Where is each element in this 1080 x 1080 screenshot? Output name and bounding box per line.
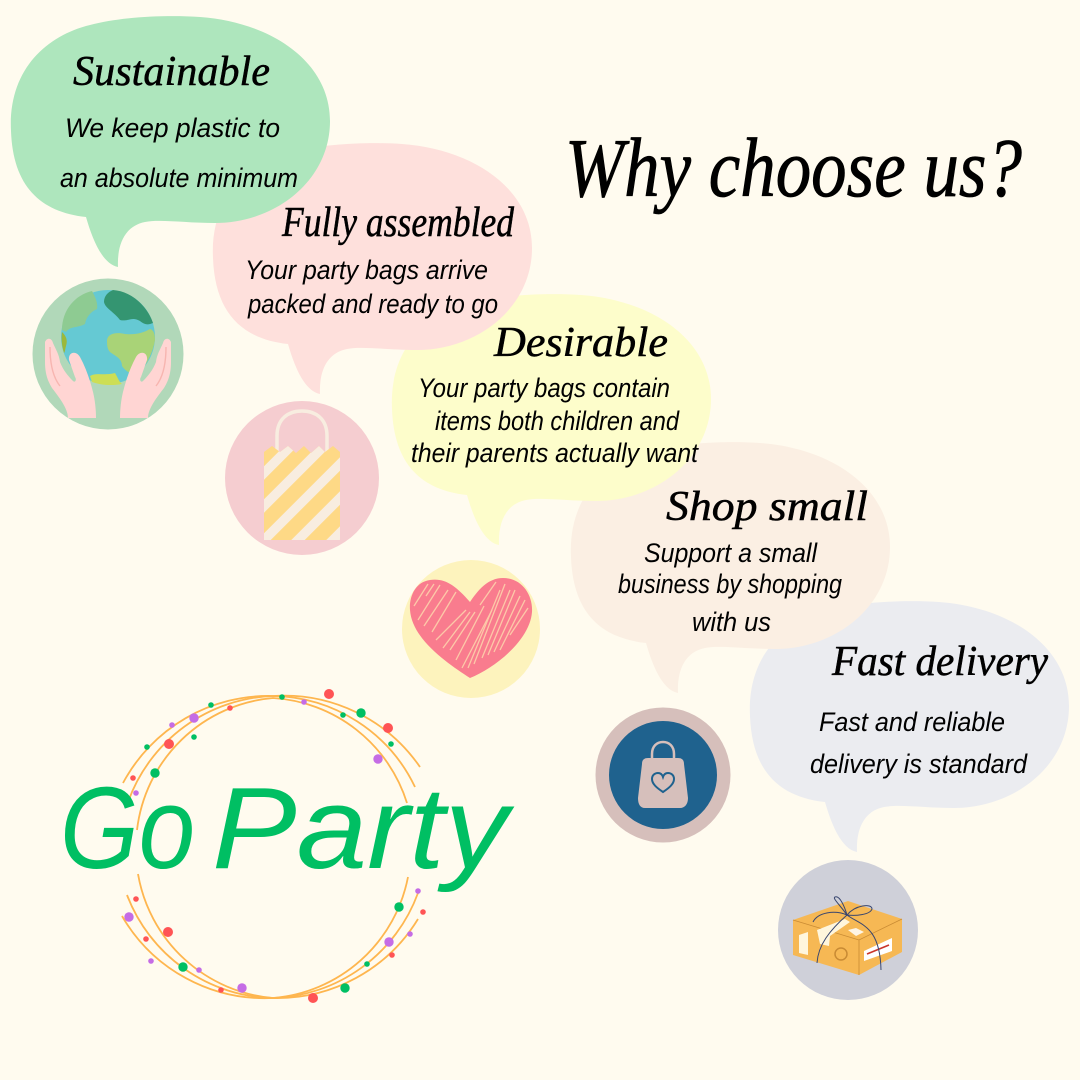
text: sustainable description — [60, 113, 298, 193]
panel: fully assembled — [213, 143, 532, 394]
heading: fully assembled: Fully assembled — [281, 200, 515, 246]
text: shop small description: business by shopping — [618, 569, 842, 599]
right hand — [120, 339, 171, 418]
text: desirable description — [411, 373, 699, 468]
panel: sustainable — [11, 16, 330, 267]
logo wordmark — [60, 763, 515, 893]
heading: shop small: Shop small — [666, 484, 868, 530]
text: fully assembled description: packed and ready to go — [247, 289, 498, 319]
logo wordmark: Go — [60, 763, 195, 893]
text: shop small description: Support a small — [644, 538, 818, 568]
logo wordmark: Party — [212, 763, 515, 893]
icon: parcel box with string — [778, 860, 918, 1000]
speech bubble: shop small — [571, 442, 890, 693]
logo rings — [122, 696, 420, 998]
speech bubble: fully assembled — [213, 143, 532, 394]
left hand — [45, 339, 96, 418]
text: sustainable description: We keep plastic to — [65, 113, 280, 143]
text: desirable description: Your party bags contain — [418, 373, 670, 403]
text: shop small description: with us — [692, 607, 771, 637]
panel: desirable — [392, 294, 711, 545]
icon: scribbled heart — [402, 560, 540, 698]
speech bubble: desirable — [392, 294, 711, 545]
panel: fast delivery — [750, 601, 1069, 852]
speech bubble: sustainable — [11, 16, 330, 267]
text: fully assembled description — [245, 255, 498, 319]
heading: sustainable: Sustainable — [73, 49, 270, 95]
speech bubble: fast delivery — [750, 601, 1069, 852]
icon: shopping bag with heart — [596, 708, 730, 842]
text: desirable description: items both children and — [435, 406, 680, 436]
icon: striped party bag — [225, 401, 380, 558]
text: shop small description — [618, 538, 842, 637]
text: fast delivery description: Fast and reliable — [819, 707, 1005, 737]
logo confetti dots — [130, 689, 426, 1003]
icon: hands holding globe — [32, 278, 184, 430]
text: fast delivery description — [810, 707, 1028, 779]
heading: fast delivery: Fast delivery — [831, 639, 1048, 685]
text: fast delivery description: delivery is standard — [810, 749, 1028, 779]
text: fully assembled description: Your party bags arrive — [245, 255, 488, 285]
text: desirable description: their parents actually want — [411, 438, 699, 468]
heading: desirable: Desirable — [493, 320, 668, 366]
panel: shop small — [571, 442, 890, 693]
logo: go party — [60, 689, 515, 1003]
text: sustainable description: an absolute minimum — [60, 163, 298, 193]
